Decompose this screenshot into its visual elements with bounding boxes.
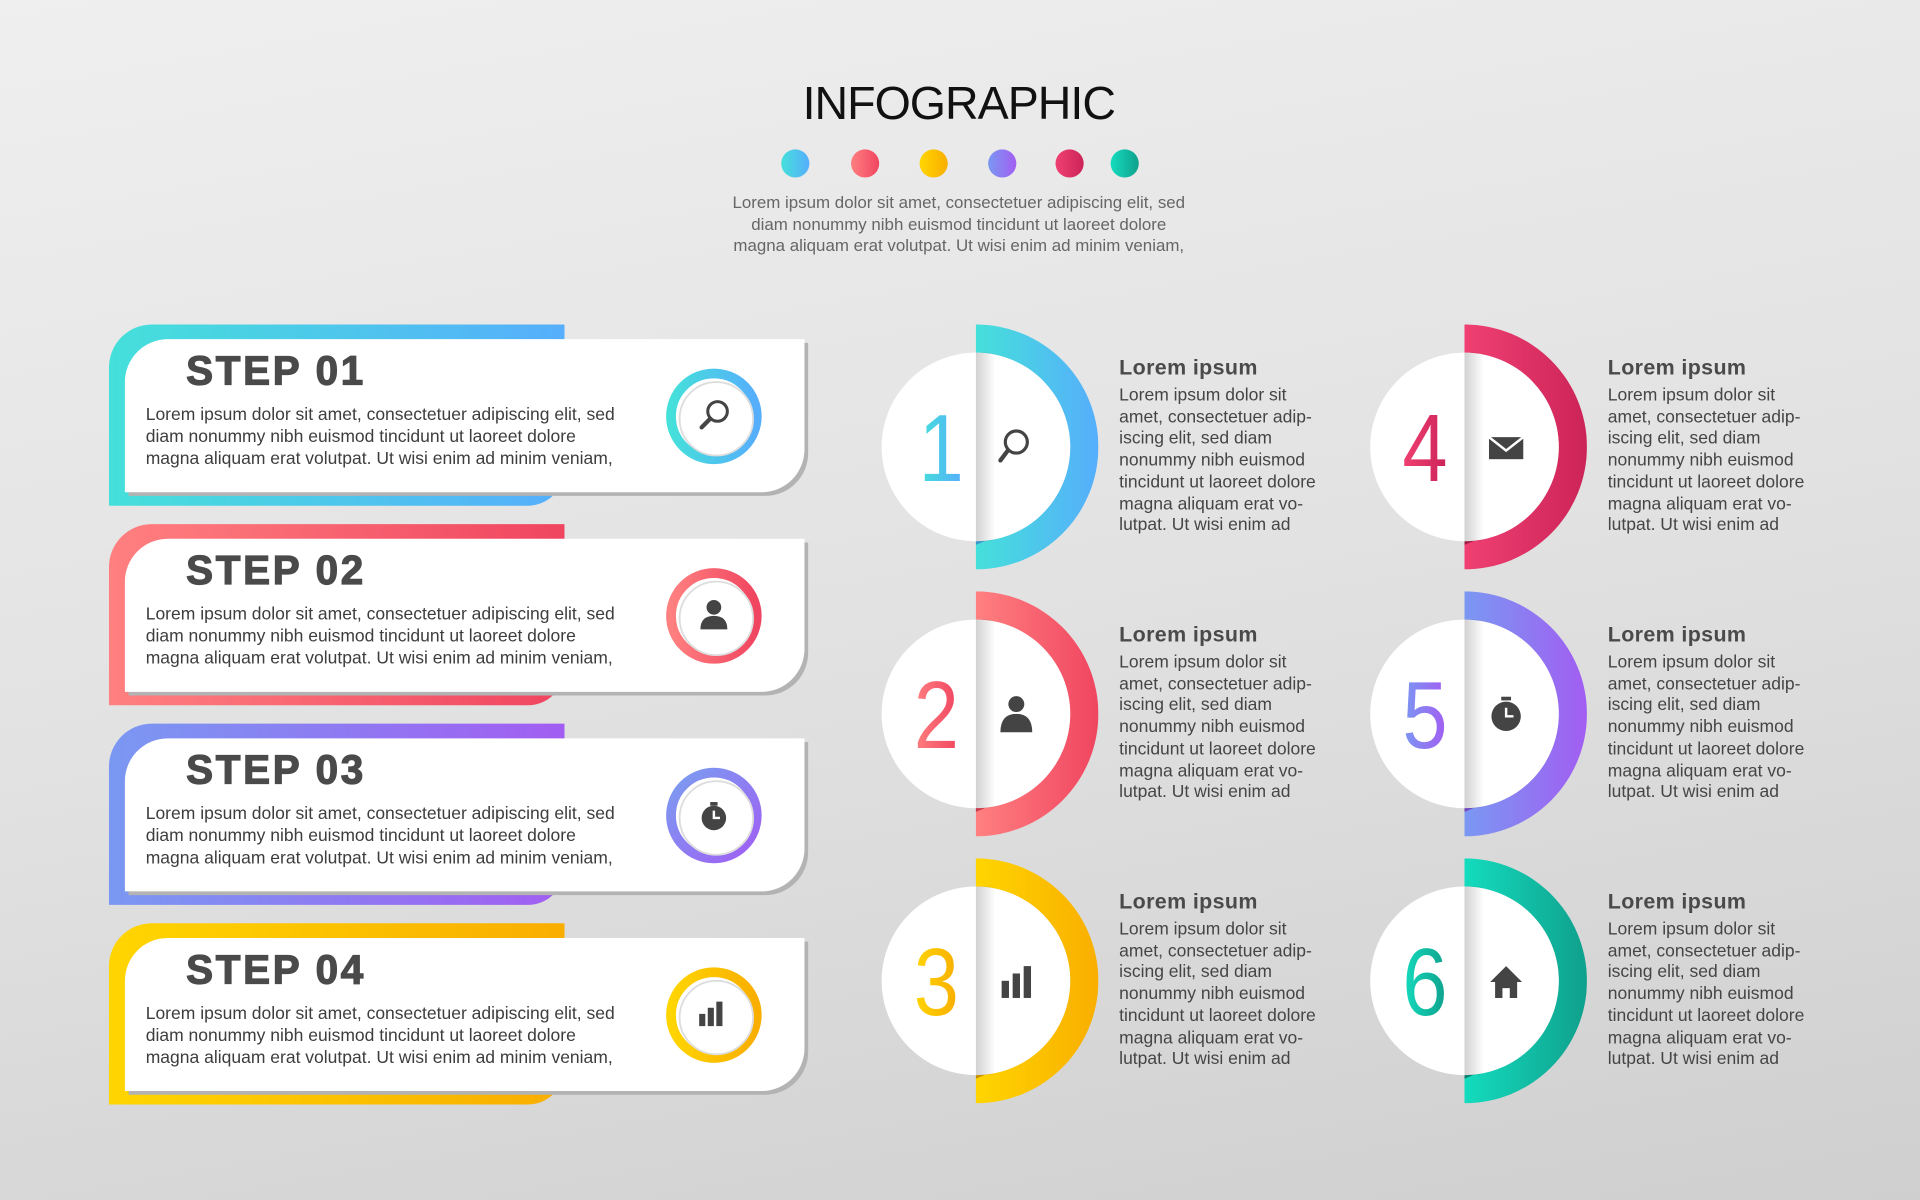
text: amet, consectetuer adip- [1608,941,1800,961]
icon: bar chart [666,967,762,1063]
text: Lorem ipsum dolor sit [1608,386,1775,405]
text block: magna aliquam erat volutpat. Ut wisi enim ad minim veniam, [146,449,613,469]
intro text [732,193,1185,255]
text: tincidunt ut laoreet dolore [1608,1006,1804,1026]
number 6: 6 [1402,928,1448,1036]
circle badge 6 [1370,858,1587,1104]
text block [146,804,615,868]
text: Lorem ipsum dolor sit [1119,386,1287,405]
icon: person [666,568,762,664]
icon: stopwatch [666,768,762,864]
text block: diam nonummy nibh euismod tincidunt ut laoreet dolore [146,627,576,647]
text [1608,386,1804,535]
item 1 [882,324,1316,570]
panel: step 02 [109,524,808,706]
number 3: 3 [914,928,959,1036]
text: lutpat. Ut wisi enim ad [1119,1050,1290,1069]
text: nonummy nibh euismod [1119,985,1305,1004]
heading: step 03: STEP 03 [186,747,366,792]
text [1608,920,1804,1069]
icon: search [666,368,762,464]
text: amet, consectetuer adip- [1119,407,1312,427]
heading: step 04: STEP 04 [186,947,366,992]
text block: Lorem ipsum dolor sit amet, consectetuer adipiscing elit, sed [146,804,615,824]
heading: Lorem ipsum [1608,622,1746,647]
text: nonummy nibh euismod [1119,718,1305,737]
text: amet, consectetuer adip- [1119,941,1312,961]
text: iscing elit, sed diam [1119,429,1272,449]
text: tincidunt ut laoreet dolore [1119,739,1316,759]
text block [146,1004,615,1068]
text [1119,386,1316,535]
text block: magna aliquam erat volutpat. Ut wisi enim ad minim veniam, [146,1048,613,1068]
number 2: 2 [914,661,959,769]
text: magna aliquam erat vo- [1608,494,1792,514]
text: iscing elit, sed diam [1608,696,1761,716]
circle badge 4 [1370,324,1587,570]
color dots [781,149,1139,178]
text block: magna aliquam erat volutpat. Ut wisi enim ad minim veniam, [146,649,613,669]
circle badge 2 [882,592,1098,836]
panel: step 01 [109,324,808,506]
intro text: diam nonummy nibh euismod tincidunt ut laoreet dolore [751,215,1166,233]
text: magna aliquam erat vo- [1119,1028,1303,1048]
text block: magna aliquam erat volutpat. Ut wisi enim ad minim veniam, [146,849,613,868]
text: Lorem ipsum dolor sit [1608,920,1775,939]
title: INFOGRAPHIC [803,78,1115,130]
panel: step 03 [109,724,808,905]
text block: diam nonummy nibh euismod tincidunt ut laoreet dolore [146,1026,576,1046]
text block: diam nonummy nibh euismod tincidunt ut laoreet dolore [146,827,576,846]
number 4: 4 [1402,394,1448,502]
heading: Lorem ipsum [1119,355,1258,380]
text: amet, consectetuer adip- [1608,674,1800,694]
item 3 [882,858,1316,1104]
text: amet, consectetuer adip- [1119,674,1312,694]
text [1608,653,1804,802]
text block: Lorem ipsum dolor sit amet, consectetuer adipiscing elit, sed [146,405,615,425]
text: nonummy nibh euismod [1608,451,1794,470]
text: tincidunt ut laoreet dolore [1119,1006,1316,1026]
text: lutpat. Ut wisi enim ad [1119,783,1290,802]
text block [146,605,615,669]
text block [146,405,615,469]
text: magna aliquam erat vo- [1608,1028,1792,1048]
circle badge 1 [882,324,1098,570]
text: tincidunt ut laoreet dolore [1608,472,1804,492]
text: lutpat. Ut wisi enim ad [1119,516,1290,535]
text: iscing elit, sed diam [1608,963,1761,983]
text: lutpat. Ut wisi enim ad [1608,783,1779,802]
circle badge 3 [882,858,1098,1104]
text block: Lorem ipsum dolor sit amet, consectetuer adipiscing elit, sed [146,605,615,624]
heading: Lorem ipsum [1119,889,1258,913]
text: iscing elit, sed diam [1119,696,1272,716]
heading: Lorem ipsum [1608,889,1746,913]
item 5 [1370,592,1804,836]
text: amet, consectetuer adip- [1608,407,1800,427]
number 1: 1 [919,394,964,502]
text: nonummy nibh euismod [1608,985,1794,1004]
text: nonummy nibh euismod [1119,451,1305,470]
intro text: magna aliquam erat volutpat. Ut wisi enim ad minim veniam, [733,236,1184,255]
text: Lorem ipsum dolor sit [1119,920,1287,939]
text: iscing elit, sed diam [1608,429,1761,449]
text [1119,920,1316,1069]
text: Lorem ipsum dolor sit [1119,653,1287,672]
heading: step 01: STEP 01 [186,348,366,393]
number 5: 5 [1402,661,1448,769]
panel: step 04 [108,923,808,1104]
text [1119,653,1316,802]
item 2 [882,592,1316,836]
text: tincidunt ut laoreet dolore [1608,739,1804,759]
text: lutpat. Ut wisi enim ad [1608,516,1779,535]
text: tincidunt ut laoreet dolore [1119,472,1316,492]
intro text: Lorem ipsum dolor sit amet, consectetuer adipiscing elit, sed [732,193,1185,212]
text block: diam nonummy nibh euismod tincidunt ut laoreet dolore [146,427,576,447]
text: magna aliquam erat vo- [1119,494,1303,514]
text: lutpat. Ut wisi enim ad [1608,1050,1779,1069]
circle badge 5 [1370,592,1587,836]
text block: Lorem ipsum dolor sit amet, consectetuer adipiscing elit, sed [146,1004,615,1024]
item 4 [1370,324,1804,570]
heading: step 02: STEP 02 [186,547,366,593]
heading: Lorem ipsum [1608,355,1746,380]
text: magna aliquam erat vo- [1119,761,1303,781]
text: iscing elit, sed diam [1119,963,1272,983]
text: Lorem ipsum dolor sit [1608,653,1775,672]
text: nonummy nibh euismod [1608,718,1794,737]
heading: Lorem ipsum [1119,622,1258,647]
item 6 [1370,858,1804,1104]
text: magna aliquam erat vo- [1608,761,1792,781]
